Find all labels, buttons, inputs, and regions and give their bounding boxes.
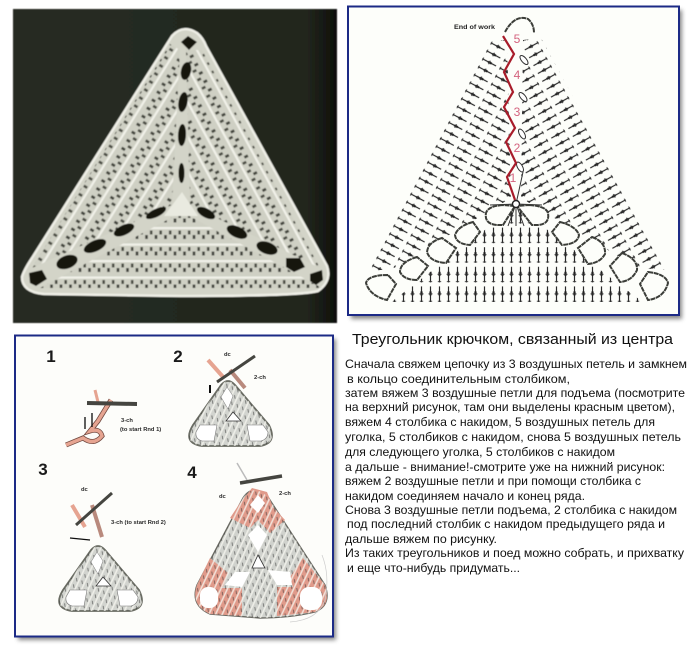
chart: round numbers: 4	[514, 68, 521, 82]
holes along the three spokes	[29, 36, 323, 286]
instructions text block: и еще что-нибудь придумать...	[347, 562, 520, 575]
yarn step labels: dc	[224, 352, 232, 358]
yarn step labels: 3-ch (to start Rnd 2)	[111, 520, 166, 526]
chart: round numbers: 2	[514, 141, 521, 155]
panel: crochet photo	[13, 9, 337, 323]
instructions text block	[345, 358, 687, 575]
instructions text block: в кольцо соединительным столбиком,	[347, 373, 570, 386]
crocheted triangle	[22, 29, 328, 296]
instructions text block: уголка, 5 столбиков с накидом, снова 5 воздушных петель	[345, 431, 681, 444]
instructions text block: Снова 3 воздушные петли подъема, 2 столбика с накидом	[345, 504, 677, 517]
instructions text block: на верхний рисунок, там они выделены красным цветом),	[345, 401, 675, 414]
chart: stitch symbols	[366, 18, 668, 303]
yarn step labels: 3-ch	[121, 418, 133, 424]
chart: centre ring	[512, 200, 520, 208]
yarn step labels: 2-ch	[279, 491, 291, 497]
step 2: first round diagram	[189, 356, 272, 446]
instructions text block: для следующего уголка, 5 столбиков с накидом	[345, 446, 615, 459]
instructions text block: накидом соединяем начало и конец ряда.	[345, 490, 585, 503]
yarn step labels: dc	[219, 494, 227, 500]
yarn step labels	[81, 352, 291, 526]
instructions text block: дальше вяжем по рисунку.	[345, 533, 497, 546]
label: end of work: End of work	[454, 24, 495, 31]
yarn step labels: dc	[81, 487, 89, 493]
step numbers	[38, 347, 197, 482]
step 4: two-colour finished diagram	[195, 463, 327, 622]
chart: round numbers: 5	[514, 32, 521, 46]
chart: round numbers	[510, 32, 521, 185]
panel: stitch chart	[348, 6, 682, 319]
instructions text block: под последний столбик с накидом предыдущего ряда и	[347, 518, 665, 531]
chart: chain loops	[366, 18, 668, 300]
step 1: starting chain	[66, 390, 137, 445]
instructions text block: затем вяжем 3 воздушные петли для подъема (посмотрите	[345, 387, 685, 400]
instructions text block: вяжем 2 воздушные петли и при помощи столбика с	[345, 475, 641, 488]
step numbers: 3	[38, 460, 48, 479]
instructions text block: Сначала свяжем цепочку из 3 воздушных петель и замкнем	[345, 358, 687, 371]
instructions text block: вяжем 4 столбика с накидом, 5 воздушных петель для	[345, 416, 655, 429]
instructions text block: Из таких треугольников и поед можно собрать, и прихватку	[345, 547, 684, 560]
yarn step labels: (to start Rnd 1)	[120, 427, 161, 433]
chart: round numbers: 3	[514, 105, 521, 119]
chart: round numbers: 1	[510, 171, 517, 185]
chart: red starting chain	[503, 36, 516, 200]
panel: step-by-step illustrations	[15, 336, 336, 640]
step numbers: 4	[187, 463, 197, 482]
step numbers: 2	[173, 347, 183, 366]
step numbers: 1	[46, 347, 56, 366]
instructions text block: а дальше - внимание!-смотрите уже на нижний рисунок:	[345, 461, 665, 474]
title: Треугольник крючком, связанный из центра	[352, 332, 674, 348]
yarn step labels: 2-ch	[254, 375, 266, 381]
step 3: second round start diagram	[59, 493, 142, 611]
